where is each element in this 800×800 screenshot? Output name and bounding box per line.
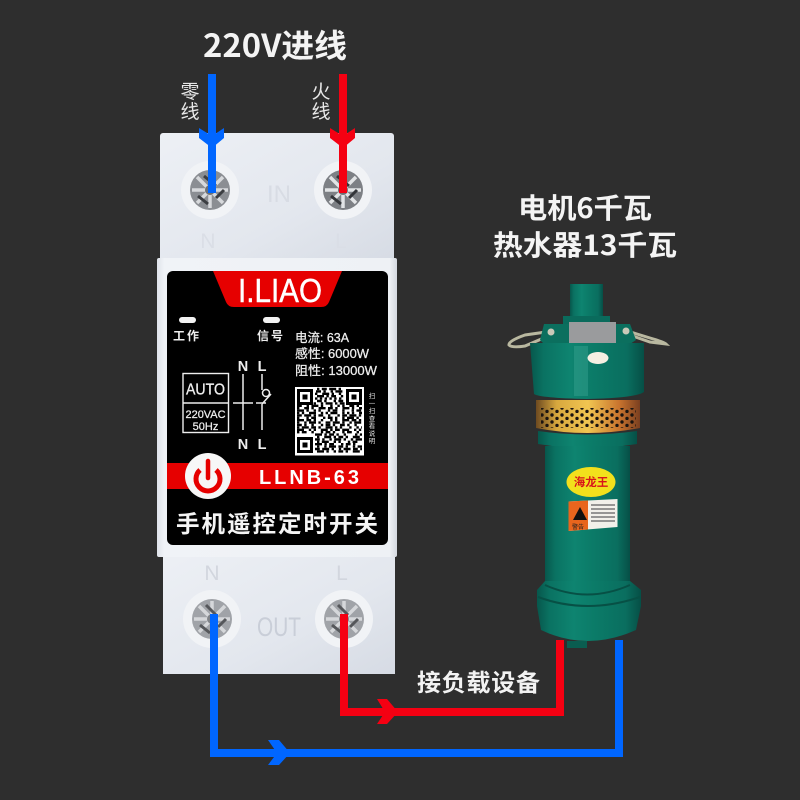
device bottom housing bbox=[163, 550, 395, 674]
auto voltage box: 220VAC bbox=[186, 409, 226, 421]
specs text: 电流: 63A bbox=[295, 331, 350, 345]
neutral label bbox=[180, 77, 200, 124]
pump collar bbox=[563, 316, 610, 324]
pump main body bbox=[545, 446, 630, 586]
embossed L top: L bbox=[335, 230, 347, 253]
pump brand oval: 海龙王 bbox=[574, 474, 608, 490]
indicator work bbox=[179, 317, 196, 323]
pump window bbox=[588, 352, 608, 364]
scan caption: 看 bbox=[369, 422, 376, 430]
handle bolts bbox=[548, 328, 630, 336]
pump strainer screen bbox=[536, 400, 640, 433]
scan caption: 扫 bbox=[369, 391, 375, 400]
work label: 工作 bbox=[173, 327, 201, 344]
device middle band bbox=[157, 258, 397, 557]
embossed L bottom: L bbox=[336, 562, 348, 585]
arrow: blue input wire bbox=[199, 74, 224, 193]
pump lugs bbox=[540, 324, 636, 344]
load power caption bbox=[493, 187, 677, 264]
label black background bbox=[167, 271, 388, 545]
pump base rim bbox=[538, 585, 640, 606]
brand name: I.LIAO bbox=[238, 272, 322, 309]
pump warning label: 警告 bbox=[572, 523, 584, 531]
device label panel bbox=[167, 271, 388, 545]
load power caption: 热水器13千瓦 bbox=[493, 224, 677, 264]
pump upper body bbox=[530, 343, 644, 399]
water pump bbox=[509, 284, 666, 648]
pump lower collar bbox=[538, 431, 637, 448]
terminal screw top left bbox=[181, 161, 239, 219]
auto voltage box bbox=[183, 374, 229, 433]
live label: 线 bbox=[311, 97, 331, 124]
neutral label: 零 bbox=[180, 77, 200, 104]
specs text bbox=[295, 331, 377, 378]
neutral label: 线 bbox=[180, 97, 200, 124]
circuit symbol bbox=[233, 359, 271, 453]
load power caption: 电机6千瓦 bbox=[518, 187, 652, 227]
circuit symbol: N bbox=[238, 359, 248, 375]
embossed OUT mark: OUT bbox=[257, 612, 301, 642]
product name: 手机遥控定时开关 bbox=[176, 505, 378, 539]
pump outlet bbox=[570, 284, 603, 316]
circuit symbol: L bbox=[258, 359, 267, 375]
red model band bbox=[167, 463, 388, 489]
arrow: red output wire bbox=[344, 614, 560, 724]
scan caption: 扫 bbox=[369, 406, 375, 415]
signal label: 信号 bbox=[257, 327, 285, 344]
embossed IN mark: IN bbox=[267, 181, 291, 208]
scan caption: 明 bbox=[369, 437, 376, 445]
pump brand oval bbox=[566, 467, 616, 497]
auto voltage box: AUTO bbox=[186, 382, 225, 398]
brand red tab bbox=[213, 271, 342, 307]
load caption: 接负载设备 bbox=[417, 663, 540, 698]
device: din-rail switch bbox=[157, 133, 397, 674]
terminal screw top right bbox=[314, 161, 372, 219]
specs text: 阻性: 13000W bbox=[295, 364, 377, 378]
circuit symbol: L bbox=[258, 437, 267, 453]
arrow: red input wire bbox=[330, 74, 355, 193]
scan caption: 说 bbox=[369, 428, 376, 438]
title: 220V进线 bbox=[203, 21, 347, 67]
pump highlight bbox=[574, 346, 588, 396]
QR code bbox=[295, 387, 364, 456]
pump warning label bbox=[568, 499, 618, 531]
specs text: 感性: 6000W bbox=[295, 346, 369, 361]
indicator signal bbox=[263, 317, 280, 323]
arrow: blue output wire bbox=[214, 614, 619, 765]
embossed N bottom: N bbox=[204, 562, 220, 585]
live label: 火 bbox=[311, 77, 331, 104]
model number: LLNB-63 bbox=[259, 467, 359, 489]
pump drain bbox=[567, 641, 587, 648]
power button icon bbox=[185, 453, 231, 499]
pump nameplate bbox=[569, 322, 616, 344]
auto voltage box: 50Hz bbox=[193, 421, 218, 433]
scan caption: 查 bbox=[369, 414, 376, 422]
terminal screw bottom left bbox=[183, 590, 241, 648]
pump base bbox=[537, 581, 641, 641]
circuit symbol: N bbox=[238, 437, 248, 453]
scan caption: 一 bbox=[369, 400, 376, 408]
scan caption bbox=[369, 391, 376, 445]
terminal screw bottom right bbox=[315, 590, 373, 648]
device top housing bbox=[160, 133, 394, 263]
live label bbox=[311, 77, 331, 124]
pump handles bbox=[509, 331, 666, 347]
embossed N top: N bbox=[200, 230, 216, 253]
